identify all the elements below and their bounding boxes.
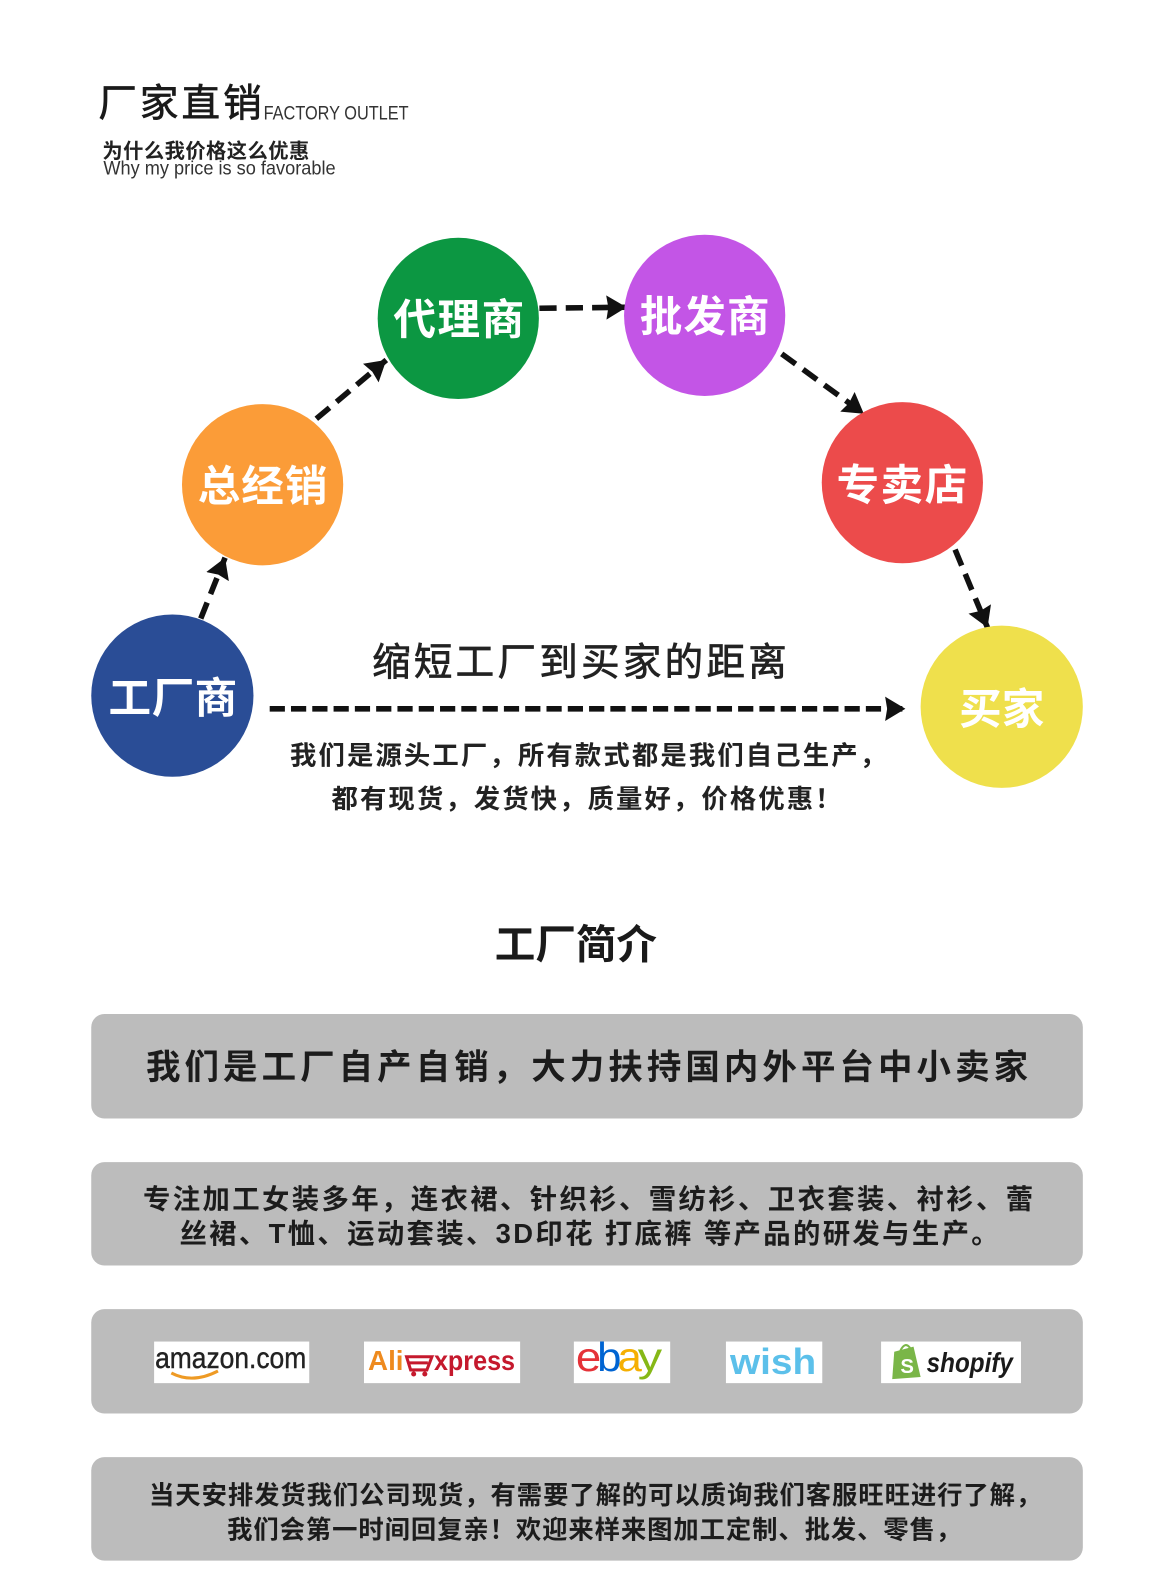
logo: aliexpress <box>364 1342 520 1383</box>
arrow: agent to wholesaler <box>539 307 627 308</box>
subtitle english: Why my price is so favorable <box>103 158 336 179</box>
node: specialty store <box>822 402 983 563</box>
panel: shipping and contact <box>91 1457 1083 1561</box>
flow description: 我们是源头工厂，所有款式都是我们自己生产， <box>290 741 886 771</box>
panel: self production: 我们是工厂自产自销，大力扶持国内外平台中小卖家 <box>146 1049 1028 1087</box>
flow description <box>290 741 886 814</box>
node: wholesaler: 批发商 <box>640 294 770 342</box>
logo: shopify <box>881 1342 1021 1383</box>
flow caption: 缩短工厂到买家的距离 <box>372 641 787 684</box>
title english: FACTORY OUTLET <box>264 104 409 125</box>
arrow: wholesaler to store <box>782 354 864 414</box>
panel: product range: 丝裙、T恤、运动套装、3D印花 打底裤 等产品的研发与生产。 <box>179 1218 999 1249</box>
logo: aliexpress: xpress <box>434 1345 515 1376</box>
logo: ebay <box>574 1334 670 1383</box>
flow description: 都有现货，发货快，质量好，价格优惠！ <box>332 784 842 814</box>
panel: self production <box>91 1014 1083 1118</box>
panel: product range <box>91 1162 1083 1266</box>
node: buyer: 买家 <box>959 686 1044 734</box>
node: general distributor: 总经销 <box>198 463 327 511</box>
logo: shopify: S <box>900 1356 914 1378</box>
node: agent <box>378 238 539 399</box>
node: agent: 代理商 <box>393 297 524 345</box>
node: factory: 工厂商 <box>108 675 237 723</box>
node: buyer <box>921 626 1083 788</box>
logo: ebay: b <box>597 1334 622 1380</box>
node: factory <box>91 615 253 777</box>
panel: shipping and contact: 当天安排发货我们公司现货，有需要了解的可以质询我们客服旺旺进行了解， <box>149 1481 1041 1510</box>
panel: platform logos <box>91 1309 1083 1414</box>
node: wholesaler <box>624 235 785 396</box>
section heading: 工厂简介 <box>495 921 657 967</box>
arrow: factory to buyer <box>270 706 905 712</box>
panel: shipping and contact: 我们会第一时间回复亲！欢迎来样来图加工定制、批发、零售， <box>227 1516 961 1544</box>
panel: product range: 专注加工女装多年，连衣裙、针织衫、雪纺衫、卫衣套装、衬衫、蕾 <box>143 1184 1033 1215</box>
logo: ebay: a <box>617 1334 642 1380</box>
logo: aliexpress: Ali <box>368 1345 404 1376</box>
logo: ebay: e <box>576 1334 601 1380</box>
arrow: factory to distributor <box>201 558 225 619</box>
logo: amazon: amazon.com <box>155 1342 306 1375</box>
node: specialty store: 专卖店 <box>836 462 967 510</box>
arrow: distributor to agent <box>316 360 386 419</box>
header <box>98 83 409 179</box>
node: general distributor <box>182 404 343 565</box>
arrow: store to buyer <box>955 550 988 628</box>
subtitle chinese: 为什么我价格这么优惠 <box>102 139 309 163</box>
logo: shopify: shopify <box>927 1347 1014 1378</box>
title: 厂家直销 <box>98 83 262 126</box>
flow arrows <box>201 307 988 709</box>
logo: wish: wish <box>729 1341 816 1382</box>
logo: ebay: y <box>638 1334 663 1380</box>
